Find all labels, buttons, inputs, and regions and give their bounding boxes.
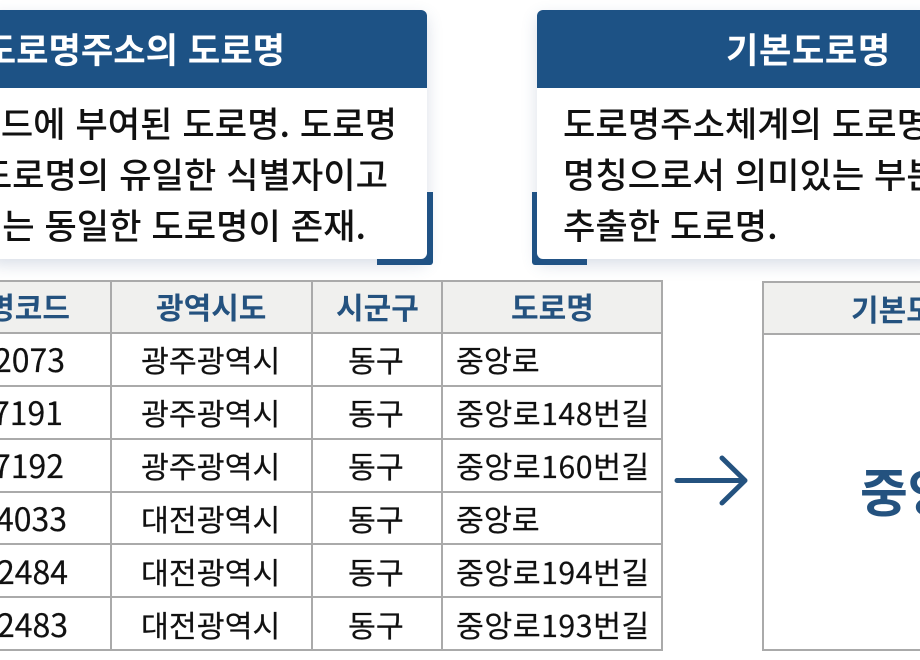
row 1: [0, 336, 540, 382]
card header bar: [0, 10, 427, 88]
panel: base road name definition card: [531, 10, 920, 271]
result header: [764, 283, 920, 335]
row 5: [0, 548, 650, 594]
row 2: [0, 389, 650, 435]
row 6: 대전광역시: [141, 602, 280, 646]
table: road name codes: [0, 280, 663, 651]
text block: base road name definition: 추출한 도로명.: [563, 199, 778, 250]
text block: road name definition: 는 동일한 도로명이 존재.: [2, 199, 366, 250]
row 3: 중앙로160번길: [456, 443, 650, 487]
row 2: 광주광역시: [141, 390, 280, 434]
row 3: [0, 442, 650, 488]
row 4: 동구: [348, 496, 404, 540]
row 5: 대전광역시: [141, 549, 280, 593]
row 3: 광주광역시: [141, 443, 280, 487]
panel: road name definition card: [0, 10, 433, 271]
accent corner: bottom right: [377, 192, 433, 265]
row 2: 중앙로148번길: [456, 390, 650, 434]
text block: base road name definition: [563, 100, 920, 250]
heading: base road name: 기본도로명: [726, 23, 891, 74]
row 4: 대전광역시: [141, 496, 280, 540]
row 1: 광주광역시: [141, 337, 280, 381]
row 2: 동구: [348, 390, 404, 434]
card body: [0, 10, 427, 259]
header row: 시군구: [336, 284, 419, 328]
row 4: [0, 495, 540, 541]
row 3: 동구: [348, 443, 404, 487]
row 1: 동구: [348, 337, 404, 381]
panel: base road name result: [762, 281, 920, 651]
header row: 광역시도: [156, 284, 266, 328]
text block: road name definition: [0, 97, 397, 250]
row 4: 중앙로: [456, 496, 540, 540]
arrow: to base road name: [674, 456, 748, 506]
card body: [537, 10, 920, 259]
row 6: [0, 601, 650, 647]
text block: road name definition: 드에 부여된 도로명. 도로명: [1, 97, 397, 148]
table header background: [0, 281, 661, 333]
accent corner: bottom left: [532, 192, 587, 265]
row 6: 중앙로193번길: [456, 602, 650, 646]
row 6: 동구: [348, 602, 404, 646]
row 1: 중앙로: [456, 337, 540, 381]
header row: 도로명: [511, 284, 594, 328]
card header bar: [537, 10, 920, 88]
row 5: 중앙로194번길: [456, 549, 650, 593]
header row: [0, 284, 594, 328]
row 5: 동구: [348, 549, 404, 593]
